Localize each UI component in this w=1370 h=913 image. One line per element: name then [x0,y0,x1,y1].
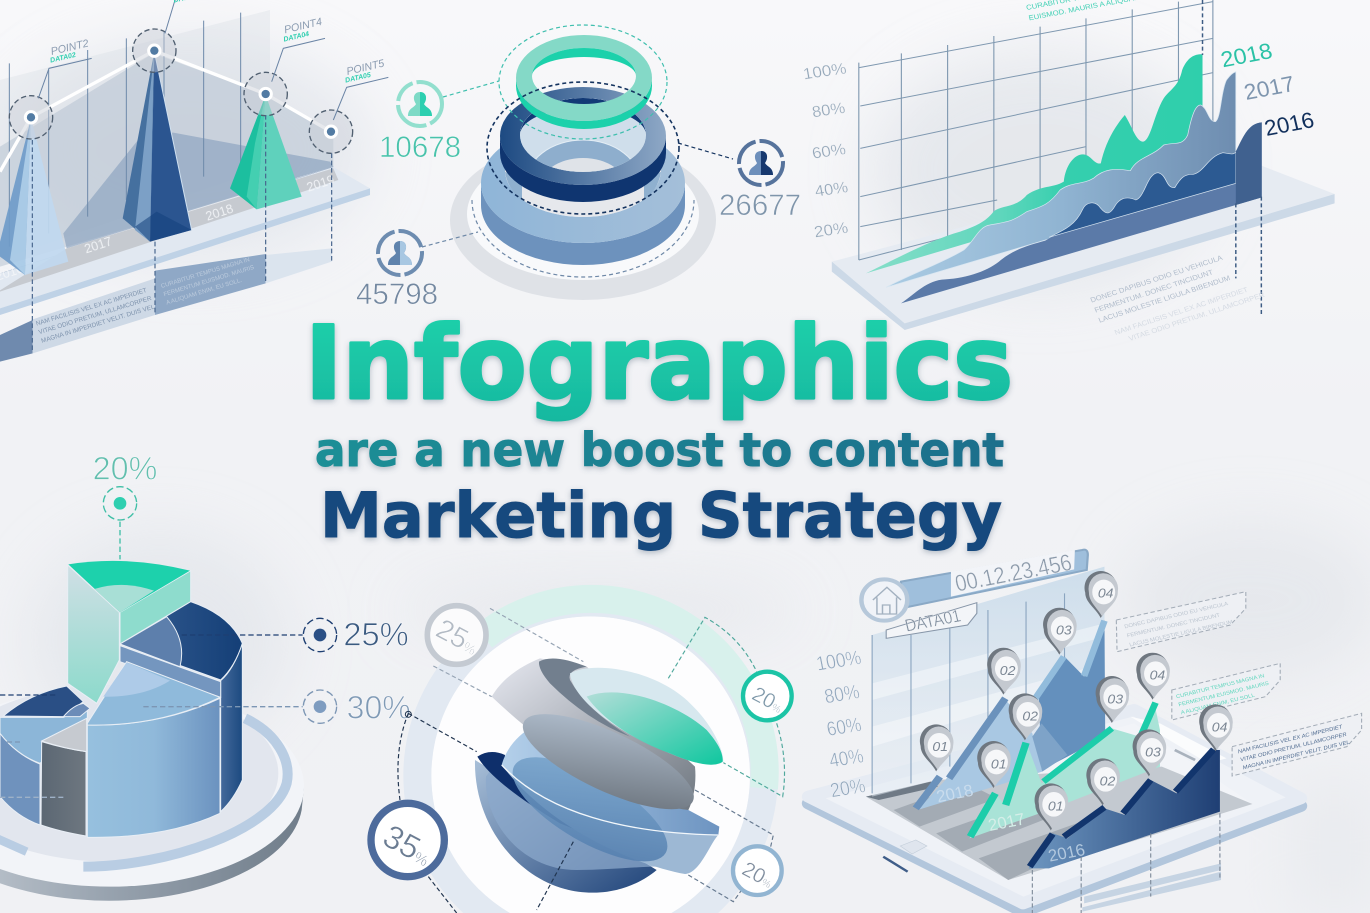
dashed orbits [422,25,733,277]
header bar: DATA01 [903,605,963,635]
axis labels: 40% [813,178,850,200]
series 2016 peaks [1029,749,1220,868]
panel: exploded sphere (bottom centre) [371,599,792,913]
sphere middle [498,727,719,881]
map pins: 02 [1100,774,1116,788]
note boxes: A ALIQUAM ENIM, EU SOLL [1180,693,1256,716]
stat: 45798: 45798 [356,278,438,311]
pyramid 2016 [0,118,68,275]
series 2018 [866,54,1203,273]
point labels [38,0,388,120]
panel: 3D pie chart (bottom left) [0,450,411,901]
description band: VITAE ODIO PRETIUM, ULLAMCORPER [38,295,153,336]
map pins: 04 [1150,668,1165,683]
series 2018 peaks [916,620,1105,810]
point labels: DATA05 [345,72,372,85]
slice: gray [41,718,87,836]
description text [1025,0,1266,346]
callout: 30% [303,689,411,725]
year labels [1218,38,1316,141]
badge: 20% blue [733,846,782,895]
note boxes: DONEC DAPIBUS ODIO EU VEHICULA [1124,601,1229,630]
sphere upper band [492,658,705,828]
trend line with nodes [0,29,353,352]
back wall [872,567,1104,797]
callout: 25% [303,616,409,653]
year labels: 2018 [204,202,235,224]
stat: 45798 [356,231,438,311]
axis labels: 60% [825,714,863,741]
slice: left blue [0,686,90,825]
slice: 30% light blue [87,662,220,837]
map pins: 01 [991,757,1007,771]
badge: 20% green: 20% [748,682,787,718]
stat: 26677 [719,141,801,222]
axis labels: 20% [813,218,850,241]
description band: CURABITUR TEMPUS MAGNA IN [160,257,251,290]
callout: 20% [93,450,157,520]
note boxes: FERMENTUM EUISMOD. MAURIS [1178,681,1270,708]
sphere lower bowl [475,752,657,893]
year labels: 2016 [1262,107,1316,141]
series 2018 peaks: 2018 [934,781,975,806]
badge: 20% green [743,672,792,720]
dashed connectors [398,608,785,913]
platform [832,155,1335,330]
year labels: 2017 [1242,71,1297,105]
year labels: 2019 [305,173,336,195]
description text: VITAE ODIO PRETIUM, ULLAMCORPER [1127,290,1266,343]
description text: LACUS MOLESTIE LIGULA BIBENDUM [1097,273,1231,324]
note boxes: VITAE ODIO PRETIUM, ULLAMCORPER [1240,732,1348,763]
series 2017 peaks [969,703,1160,838]
map pins: 03 [1056,623,1072,637]
year labels: 2017 [83,234,114,256]
map pins: 01 [932,740,948,754]
callout: 30%: 30% [347,689,411,725]
year labels: 2018 [1218,38,1275,72]
axis labels [814,647,868,802]
note boxes: MAGNA IN IMPERDIET VELIT. DUIS VEL [1242,740,1351,771]
description text: DONEC DAPIBUS ODIO EU VEHICULA [1089,253,1224,304]
year labels [0,173,336,284]
header bar [861,550,1088,638]
callout: 20%: 20% [93,450,157,486]
title: Infographics: Infographics [305,304,1013,422]
point labels: POINT2 [50,38,90,58]
badge: 20% blue: 20% [738,857,777,893]
axis labels: 60% [810,140,848,162]
panel: pyramid line chart (top left) [0,0,388,362]
stat: 26677: 26677 [719,189,801,222]
base disc [0,685,304,901]
point labels: DATA04 [283,31,310,44]
map pins: 02 [1022,709,1039,723]
grid [859,0,1213,260]
map pins: 01 [1048,799,1064,814]
chart wall layers [0,10,333,282]
slice: 20% green [68,561,191,703]
platform [0,167,370,315]
badge: 35% [371,803,444,877]
series 2016 peaks: 2016 [1046,840,1087,865]
note boxes: LACUS MOLESTIE LIGULA BIBENDUM [1129,620,1234,648]
callout: 25%: 25% [343,616,409,653]
subtitle: are a new boost to content: are a new boost to content [315,423,1004,477]
dashed leaders [1203,0,1261,315]
badge: 25%: 25% [431,613,485,662]
series 2017 [886,72,1236,287]
pyramid 2017 [123,52,192,242]
axis labels: 80% [823,681,862,708]
header bar: 00.12.23.456 [953,550,1074,597]
stat: 10678 [379,82,461,164]
axis labels: 80% [810,99,847,121]
pyramid 2018 [230,95,302,209]
middle ring [500,87,666,202]
description band: MAGNA IN IMPERDIET VELIT. DUIS VEL [40,303,156,345]
lower ring [481,123,685,265]
panel: stacked rings [422,25,733,300]
axis labels: 20% [829,775,868,802]
home button and speaker [883,840,927,872]
outer ring [417,599,765,913]
series 2017 peaks: 2017 [986,809,1027,835]
map pins: 03 [1107,692,1124,706]
top ring [516,35,652,129]
axis labels: 40% [827,745,866,772]
tablet body [808,710,1301,912]
map pins: 03 [1145,745,1161,760]
description band: NAM FACILISIS VEL EX AC IMPERDIET [35,287,148,328]
slice: 25% dark blue [120,602,242,812]
description band: FERMENTUM EUISMOD. MAURIS [163,265,255,298]
map pins: 02 [1000,664,1016,678]
description text: FERMENTUM. DONEC TINCIDUNT [1093,268,1215,314]
point labels: POINT5 [345,58,386,78]
panel: area chart (top right) [802,0,1335,346]
map pins [920,571,1233,830]
axis labels: 100% [802,59,848,83]
description text: NAM FACILISIS VEL EX AC IMPERDIET [1113,285,1250,337]
stat: 10678: 10678 [379,131,461,164]
axis labels [802,59,850,241]
point labels: DATA02 [50,52,77,65]
subtitle: Marketing Strategy: Marketing Strategy [320,479,1002,552]
point labels: POINT4 [283,16,323,36]
axis labels: 100% [814,647,863,675]
note boxes: NAM FACILISIS VEL EX AC IMPERDIET [1237,724,1344,755]
note boxes: FERMENTUM. DONEC TINCIDUNT [1126,613,1221,639]
description band: A ALIQUAM ENIM, EU SOLL. [166,278,243,306]
description band [0,248,332,362]
map pins: 04 [1098,586,1113,601]
panel: tablet peak chart (bottom right) [808,550,1362,913]
note boxes: CURABITUR TEMPUS MAGNA IN [1176,673,1265,700]
callout dashes [0,522,303,797]
sphere green cap [570,668,723,765]
badge: 35%: 35% [377,817,439,873]
badge: 25% [427,606,486,664]
map pins: 04 [1212,720,1227,735]
dashed drop lines [1032,813,1221,913]
series 2016 [901,122,1262,303]
note boxes [1116,592,1362,776]
ground ellipse [450,140,716,300]
